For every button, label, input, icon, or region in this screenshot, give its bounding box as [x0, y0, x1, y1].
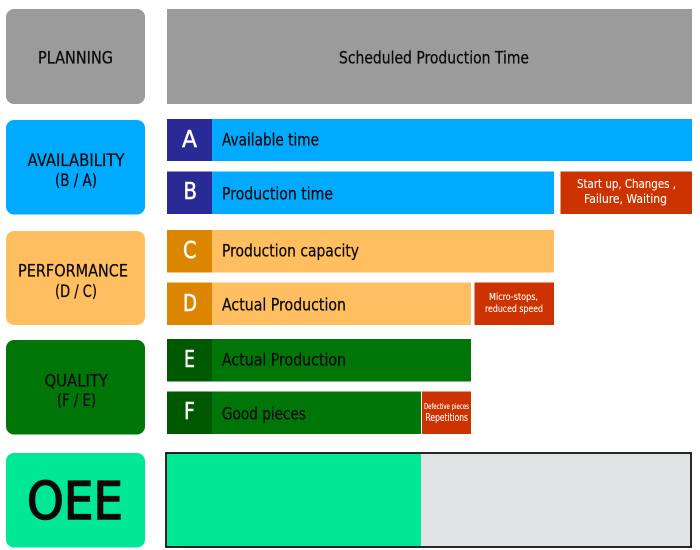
- panel: quality label: (F / E): [57, 391, 96, 410]
- bar: D actual production: [167, 282, 471, 325]
- panel: performance label: [6, 231, 145, 325]
- bar: A available time: [167, 119, 692, 161]
- bar: F good pieces: F: [184, 397, 195, 425]
- panel: performance label: (D / C): [55, 282, 97, 301]
- panel: OEE label: [6, 453, 145, 548]
- bar: C production capacity: [167, 230, 554, 272]
- loss: availability losses: [560, 172, 692, 214]
- bar: B production time: [167, 172, 554, 214]
- loss: performance losses: reduced speed: [485, 304, 543, 315]
- bar: OEE result: [166, 453, 691, 547]
- bar: B production time: B: [184, 177, 197, 205]
- bar: F good pieces: [167, 392, 421, 434]
- bar: A available time: Available time: [222, 130, 319, 150]
- bar: scheduled production time: Scheduled Production Time: [339, 48, 529, 68]
- panel: OEE label: OEE: [27, 472, 123, 532]
- bar: F good pieces: Good pieces: [222, 404, 306, 424]
- loss: performance losses: [474, 282, 554, 325]
- loss: availability losses: Start up, Changes ,: [577, 176, 676, 191]
- loss: quality losses: [422, 392, 471, 434]
- bar: C production capacity: C: [183, 236, 196, 264]
- bar: scheduled production time: [167, 9, 692, 104]
- panel: planning label: [6, 9, 145, 104]
- bar: B production time: Production time: [222, 184, 333, 204]
- loss: performance losses: Micro-stops,: [489, 292, 538, 303]
- loss: quality losses: Repetitions: [426, 412, 468, 424]
- panel: availability label: AVAILABILITY: [28, 151, 125, 170]
- panel: performance label: PERFORMANCE: [18, 262, 128, 280]
- loss: quality losses: Defective pieces: [424, 402, 469, 411]
- bar: E actual production: [167, 339, 471, 382]
- panel: availability label: [6, 120, 145, 214]
- panel: planning label: PLANNING: [38, 48, 113, 68]
- bar: C production capacity: Production capacity: [222, 242, 359, 260]
- panel: quality label: QUALITY: [44, 372, 109, 390]
- bar: A available time: A: [182, 125, 197, 153]
- bar: E actual production: E: [184, 345, 195, 373]
- bar: D actual production: D: [183, 289, 197, 317]
- panel: availability label: (B / A): [55, 171, 97, 190]
- bar: D actual production: Actual Production: [222, 296, 346, 314]
- loss: availability losses: Failure, Waiting: [584, 191, 667, 206]
- bar: E actual production: Actual Production: [222, 350, 346, 370]
- panel: quality label: [6, 340, 145, 434]
